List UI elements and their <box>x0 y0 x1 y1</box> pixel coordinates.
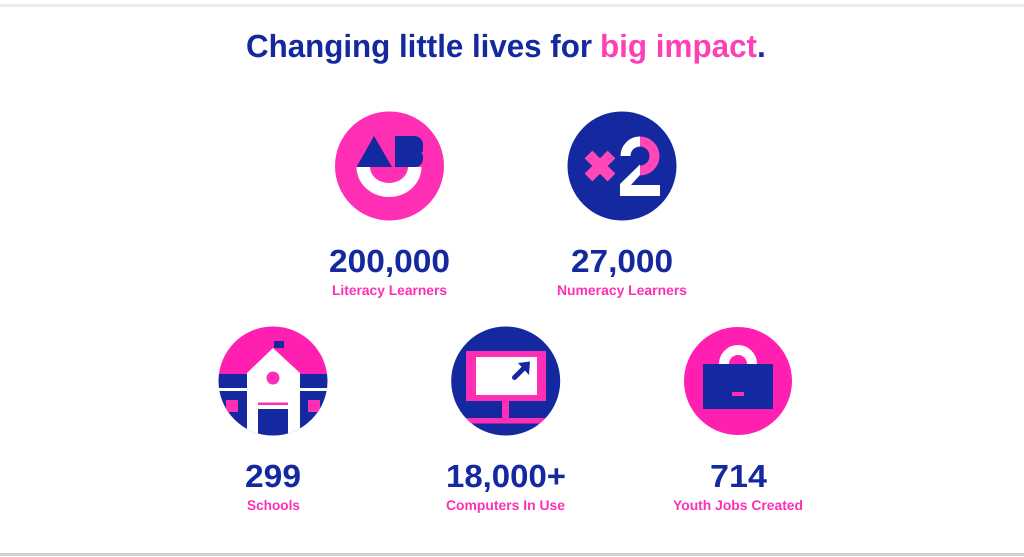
panel: computers in use <box>446 326 566 513</box>
icon: AB smile <box>335 112 444 220</box>
number: 27,000 <box>571 243 673 279</box>
panel: youth jobs created <box>673 327 803 513</box>
number: 714 <box>710 458 767 494</box>
title: big impact <box>600 28 757 64</box>
label: Computers In Use <box>446 497 565 513</box>
label: Youth Jobs Created <box>673 497 803 513</box>
title <box>246 28 766 64</box>
icon: briefcase <box>684 327 792 435</box>
label: Schools <box>247 497 300 513</box>
icon: computer monitor <box>450 326 562 436</box>
number: 200,000 <box>329 243 450 279</box>
icon: school building <box>218 326 328 437</box>
number: 18,000+ <box>446 458 566 494</box>
panel: numeracy learners <box>557 112 687 298</box>
title: Changing little lives for <box>246 28 592 64</box>
panel: literacy learners <box>329 112 450 298</box>
number: 299 <box>245 458 301 494</box>
title: . <box>757 28 766 64</box>
label: Numeracy Learners <box>557 282 687 298</box>
label: Literacy Learners <box>332 282 447 298</box>
panel: schools <box>218 326 328 513</box>
icon: times two <box>568 112 676 220</box>
